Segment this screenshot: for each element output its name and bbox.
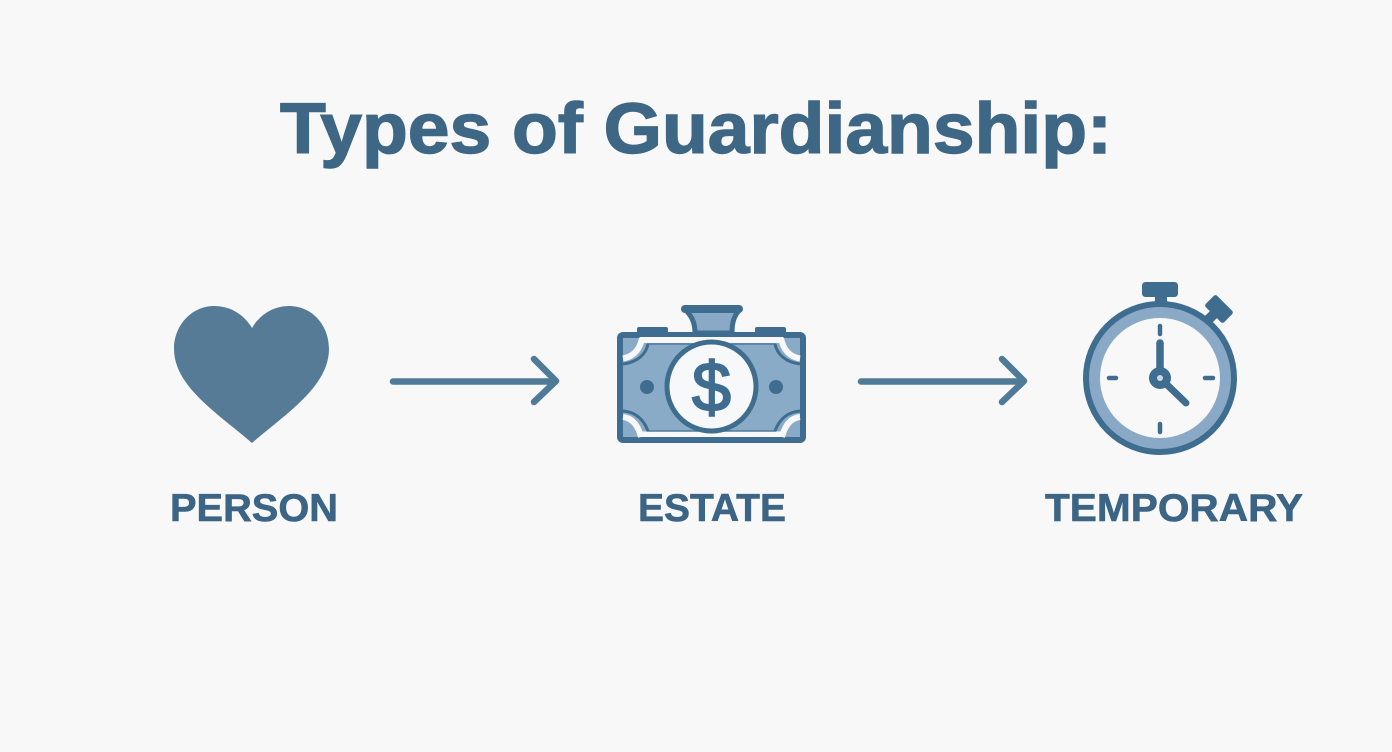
right corner ornaments — [775, 338, 800, 437]
white strips — [640, 337, 783, 343]
knob on top of banknote — [685, 309, 740, 333]
title: Types of Guardianship: — [280, 90, 1112, 169]
side button — [1203, 313, 1215, 325]
label: estate: ESTATE — [638, 487, 786, 530]
left corner ornaments — [623, 338, 648, 437]
label: person: PERSON — [170, 487, 338, 530]
icon: banknote (estate) — [620, 305, 803, 440]
tick marks — [1109, 326, 1213, 432]
label: temporary: TEMPORARY — [1045, 487, 1303, 530]
coin — [667, 342, 756, 431]
clock hands — [1160, 343, 1186, 403]
dial — [1086, 304, 1234, 452]
crown — [1155, 294, 1167, 306]
icon: stopwatch (temporary) — [1086, 282, 1234, 452]
hub — [1149, 367, 1171, 389]
arrow: estate to temporary — [861, 359, 1024, 402]
side dots — [640, 380, 654, 394]
arrow: person to estate — [393, 359, 556, 402]
icon: heart (person) — [174, 306, 329, 443]
dollar sign: $ — [692, 348, 731, 426]
note body — [620, 335, 803, 440]
